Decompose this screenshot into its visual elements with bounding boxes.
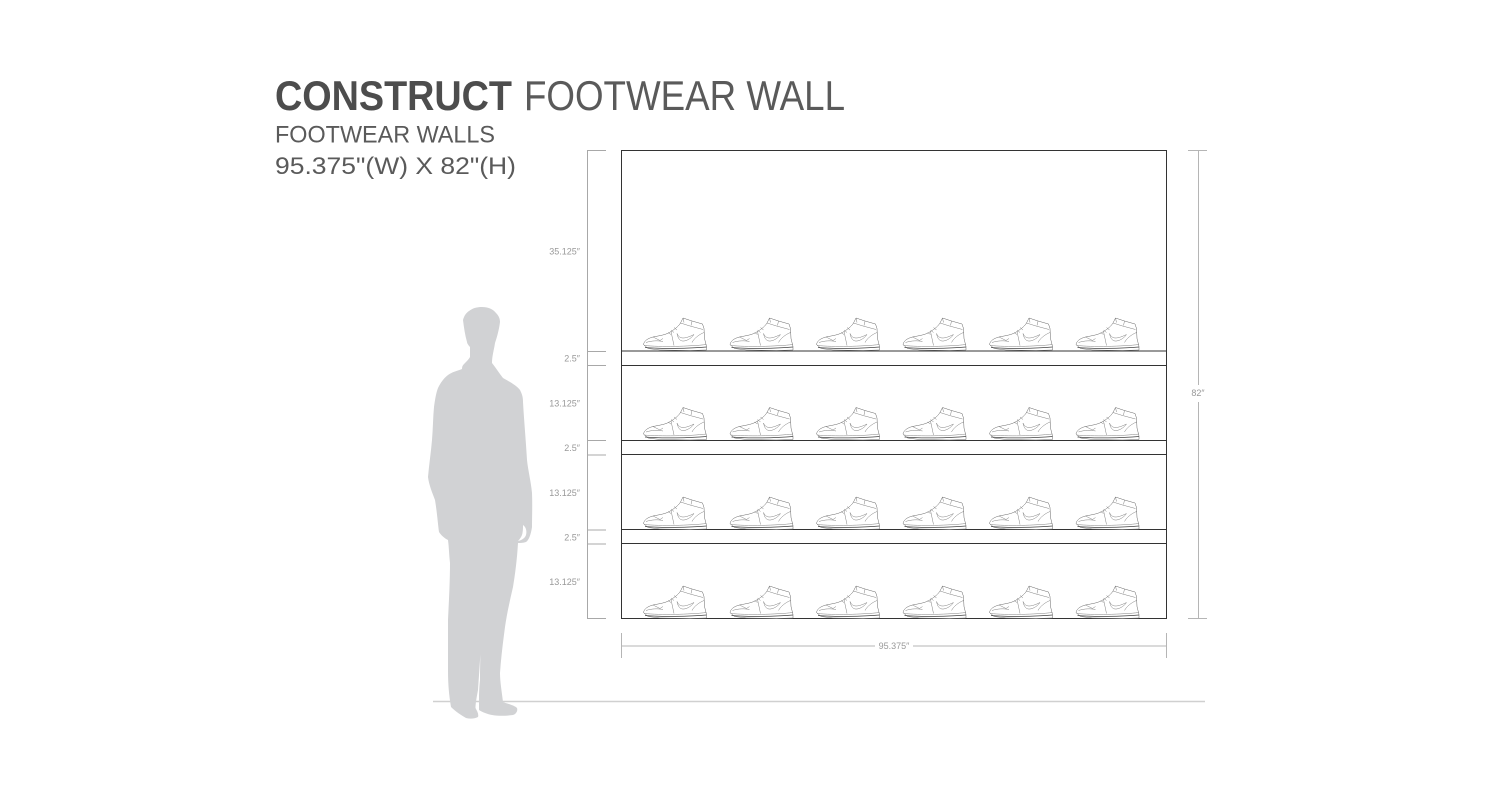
bottom width dimension: 95.375 inches: [622, 633, 1166, 658]
floor line: [433, 700, 1205, 702]
subtitle: footwear walls: FOOTWEAR WALLS: [275, 122, 495, 148]
left dimension labels: 13.125″: [549, 398, 581, 408]
shelf 2: [622, 440, 1166, 454]
left dimension labels: 13.125″: [549, 488, 581, 498]
shelf 1: [622, 351, 1166, 366]
title: CONSTRUCT: [275, 72, 512, 119]
left dimension labels: 13.125″: [549, 577, 581, 587]
right height dimension: 82 inches: 82″: [1191, 388, 1205, 398]
left dimension labels: 2.5″: [564, 354, 581, 364]
shoes: third row: [644, 497, 1139, 530]
panel: footwear wall outline: [622, 150, 1166, 618]
left dimension labels: 2.5″: [564, 443, 581, 453]
left dimension labels: 2.5″: [564, 532, 581, 542]
bottom width dimension: 95.375 inches: 95.375″: [879, 641, 910, 651]
right height dimension: 82 inches: [1188, 150, 1207, 618]
shoes: second row: [644, 408, 1139, 440]
left dimension labels: [549, 246, 581, 587]
left dimension labels: 35.125″: [549, 246, 581, 256]
shoes: top row: [644, 318, 1139, 350]
shelf 3: [622, 530, 1166, 544]
icon: human silhouette for scale: [428, 307, 532, 719]
subtitle: dimensions: 95.375"(W) X 82"(H): [275, 153, 516, 180]
shoes: bottom row: [644, 586, 1139, 618]
title: [275, 72, 845, 119]
title: FOOTWEAR WALL: [524, 72, 845, 119]
left height dimension brackets: [588, 150, 606, 618]
